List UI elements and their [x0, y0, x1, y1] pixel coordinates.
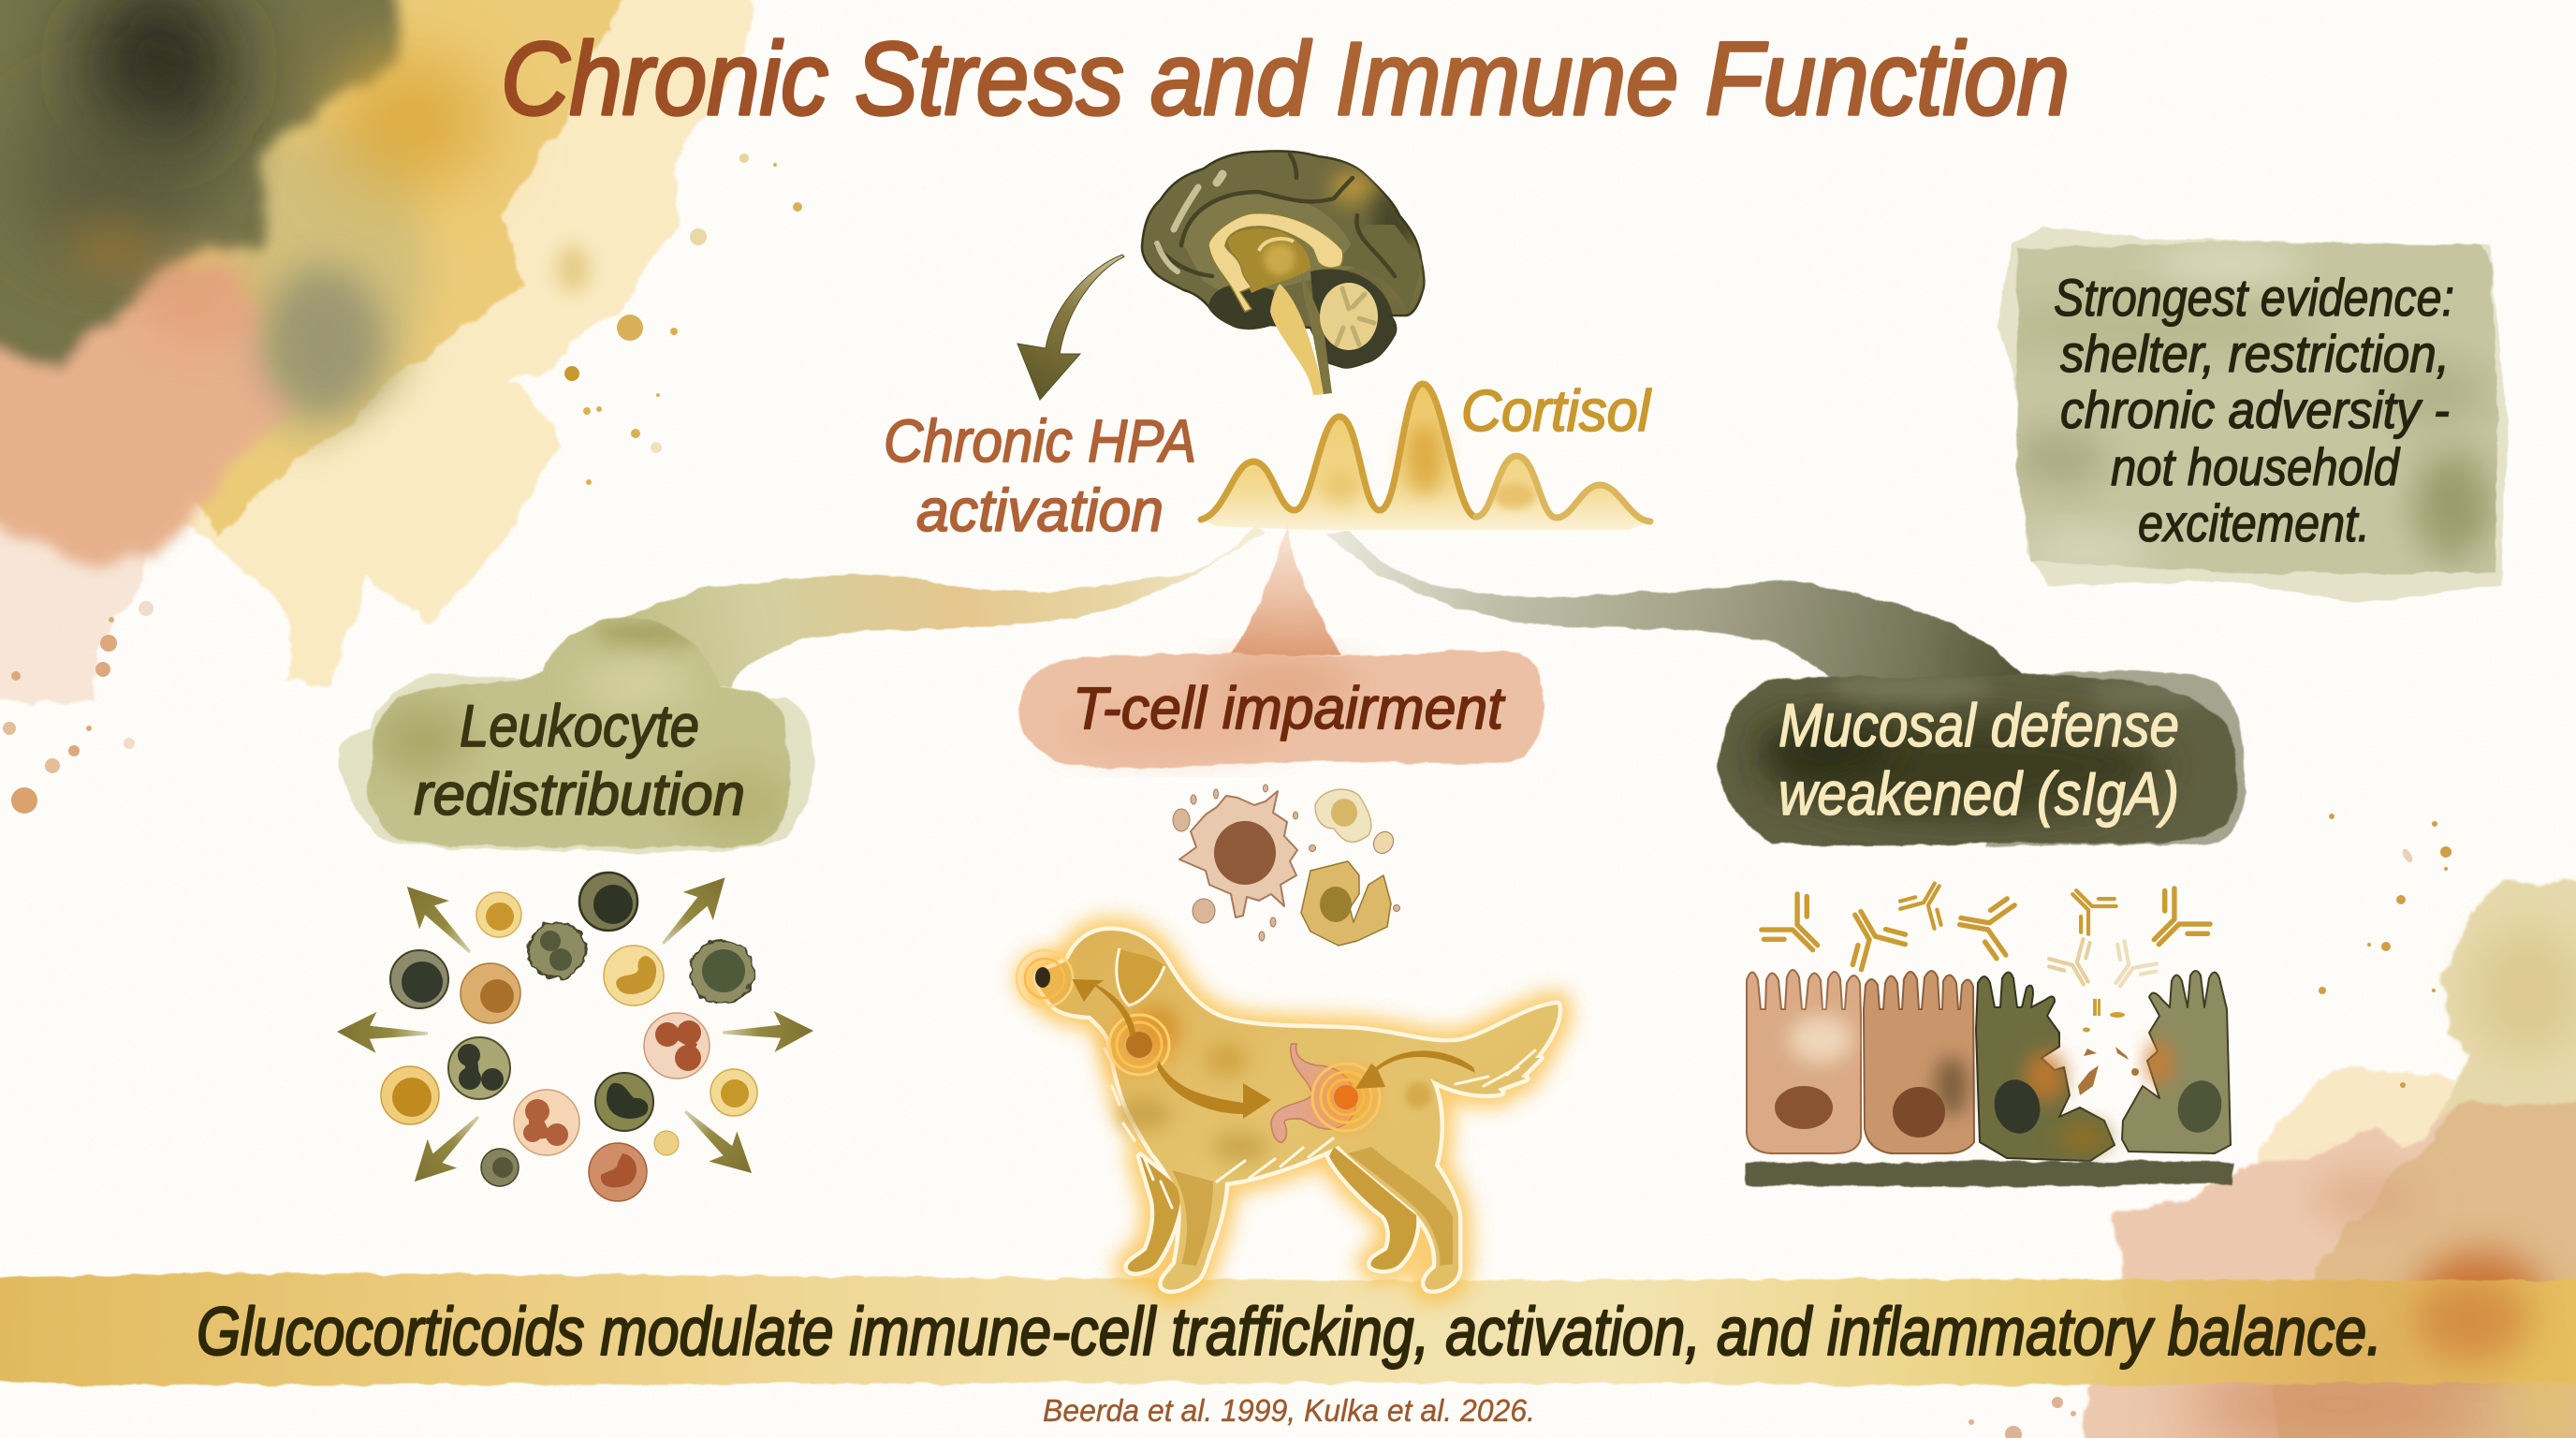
near leg shading — [1172, 1147, 1453, 1266]
cell: gold lymphocyte — [381, 1066, 439, 1124]
diagram: leukocyte cluster — [337, 863, 813, 1201]
label: chronic HPA activation: Chronic HPA — [884, 407, 1196, 475]
epithelial cell: stressed — [1864, 971, 1974, 1153]
text: mucosal defense weakened: Mucosal defense — [1778, 691, 2179, 759]
title: Chronic Stress and Immune Function — [501, 22, 2070, 137]
far legs and body — [1037, 931, 1559, 1290]
panel: mucosal defense weakened — [1716, 669, 2247, 848]
ear — [1117, 948, 1164, 1005]
cell: small olive — [481, 1149, 519, 1186]
cell: peach neutrophil — [514, 1090, 579, 1155]
text: mucosal defense weakened: weakened (sIgA) — [1778, 759, 2179, 828]
text: leukocyte redistribution — [414, 694, 745, 828]
hotspot: neck — [1105, 1011, 1173, 1078]
panel: leukocyte redistribution — [338, 609, 813, 861]
debris fragments — [1173, 785, 1400, 941]
arrow: brain to HPA — [1017, 255, 1124, 400]
cell: yellow small — [710, 1069, 757, 1116]
dog outline — [1037, 931, 1559, 1290]
citation: Beerda et al. 1999, Kulka et al. 2026. — [1043, 1393, 1535, 1428]
stomach — [1271, 1044, 1355, 1142]
text: strongest evidence: shelter, restriction, — [2060, 324, 2450, 383]
splatter dots: bottom right — [1969, 814, 2452, 1438]
debris — [2078, 1047, 2139, 1095]
pale gyri highlights — [1157, 174, 1222, 271]
diagram: damaged T cells — [1173, 785, 1400, 946]
epithelial cell: damaged dark — [1976, 972, 2115, 1161]
fur fringe strokes — [1105, 1049, 1535, 1208]
hotspot: gut — [1312, 1064, 1380, 1131]
cell: tiny yellow — [654, 1131, 679, 1155]
connector: to leukocyte box — [545, 526, 1266, 688]
brainstem — [1270, 284, 1325, 395]
cell: grey lymphocyte — [390, 950, 448, 1008]
cell: dark lymphocyte — [579, 873, 637, 931]
text: leukocyte redistribution: redistribution — [414, 762, 745, 828]
cell: pale fading cell — [1315, 789, 1371, 842]
cerebellum — [1320, 283, 1378, 350]
epithelial cell: damaged olive — [2122, 971, 2231, 1153]
label: chronic HPA activation — [884, 407, 1196, 544]
panel: strongest evidence callout — [1984, 227, 2509, 604]
splatter dots: top left — [3, 154, 802, 814]
watercolor wash: bottom right — [2086, 883, 2576, 1438]
text: mucosal defense weakened — [1778, 691, 2179, 828]
watercolor wash: top left — [0, 0, 753, 704]
gold fragments — [2083, 999, 2125, 1032]
connector: to T-cell box — [1231, 526, 1341, 655]
cell: yellow monocyte — [604, 946, 664, 1005]
panel: T-cell impairment — [1017, 651, 1544, 768]
text: strongest evidence: Strongest evidence: — [2054, 268, 2454, 327]
brain shading and lobes — [1184, 170, 1423, 374]
text: strongest evidence: not household — [2111, 437, 2401, 496]
cell: tan lymphocyte — [461, 963, 520, 1023]
corpus callosum — [1208, 213, 1343, 312]
hotspot: nose — [1013, 948, 1073, 1008]
cell: yellow lymphocyte — [476, 892, 521, 937]
text: strongest evidence — [2054, 268, 2454, 552]
label: cortisol: Cortisol — [1461, 379, 1652, 444]
chart: cortisol pulse curve — [1201, 384, 1650, 530]
label: chronic HPA activation: activation — [916, 477, 1164, 544]
text: strongest evidence: chronic adversity - — [2060, 380, 2450, 439]
illustration: golden retriever with stress hotspots — [1013, 931, 1559, 1290]
cell: pink neutrophil — [644, 1013, 710, 1078]
bottom banner strip — [0, 1273, 2576, 1386]
cell: scalloped binucleate — [529, 922, 585, 978]
cell: olive neutrophil — [448, 1037, 510, 1099]
cell: dark monocyte — [595, 1073, 653, 1131]
basement membrane — [1746, 1161, 2232, 1187]
connector: to mucosal box — [1327, 532, 2029, 683]
cell: scalloped large — [690, 940, 754, 1004]
text: strongest evidence: excitement. — [2138, 493, 2370, 552]
cell: terracotta monocyte — [589, 1143, 647, 1201]
text: leukocyte redistribution: Leukocyte — [460, 694, 699, 759]
icon: brain cross-section — [1142, 151, 1424, 395]
gyri lines — [1156, 154, 1395, 276]
text: T-cell impairment: T-cell impairment — [1073, 676, 1505, 741]
coat shading — [1118, 1006, 1431, 1162]
antibodies: sIgA — [1758, 873, 2214, 998]
dog glow — [1037, 931, 1559, 1290]
cell: fragmented cell — [1301, 861, 1391, 946]
diagram: epithelial barrier with sIgA — [1746, 873, 2232, 1187]
cell: spiky damaged T cell — [1179, 791, 1297, 917]
arrows: gut-brain signalling — [1074, 980, 1475, 1119]
arrows: outward migration — [337, 863, 813, 1196]
epithelial cell: healthy — [1747, 970, 1861, 1153]
thalamus — [1227, 228, 1310, 293]
